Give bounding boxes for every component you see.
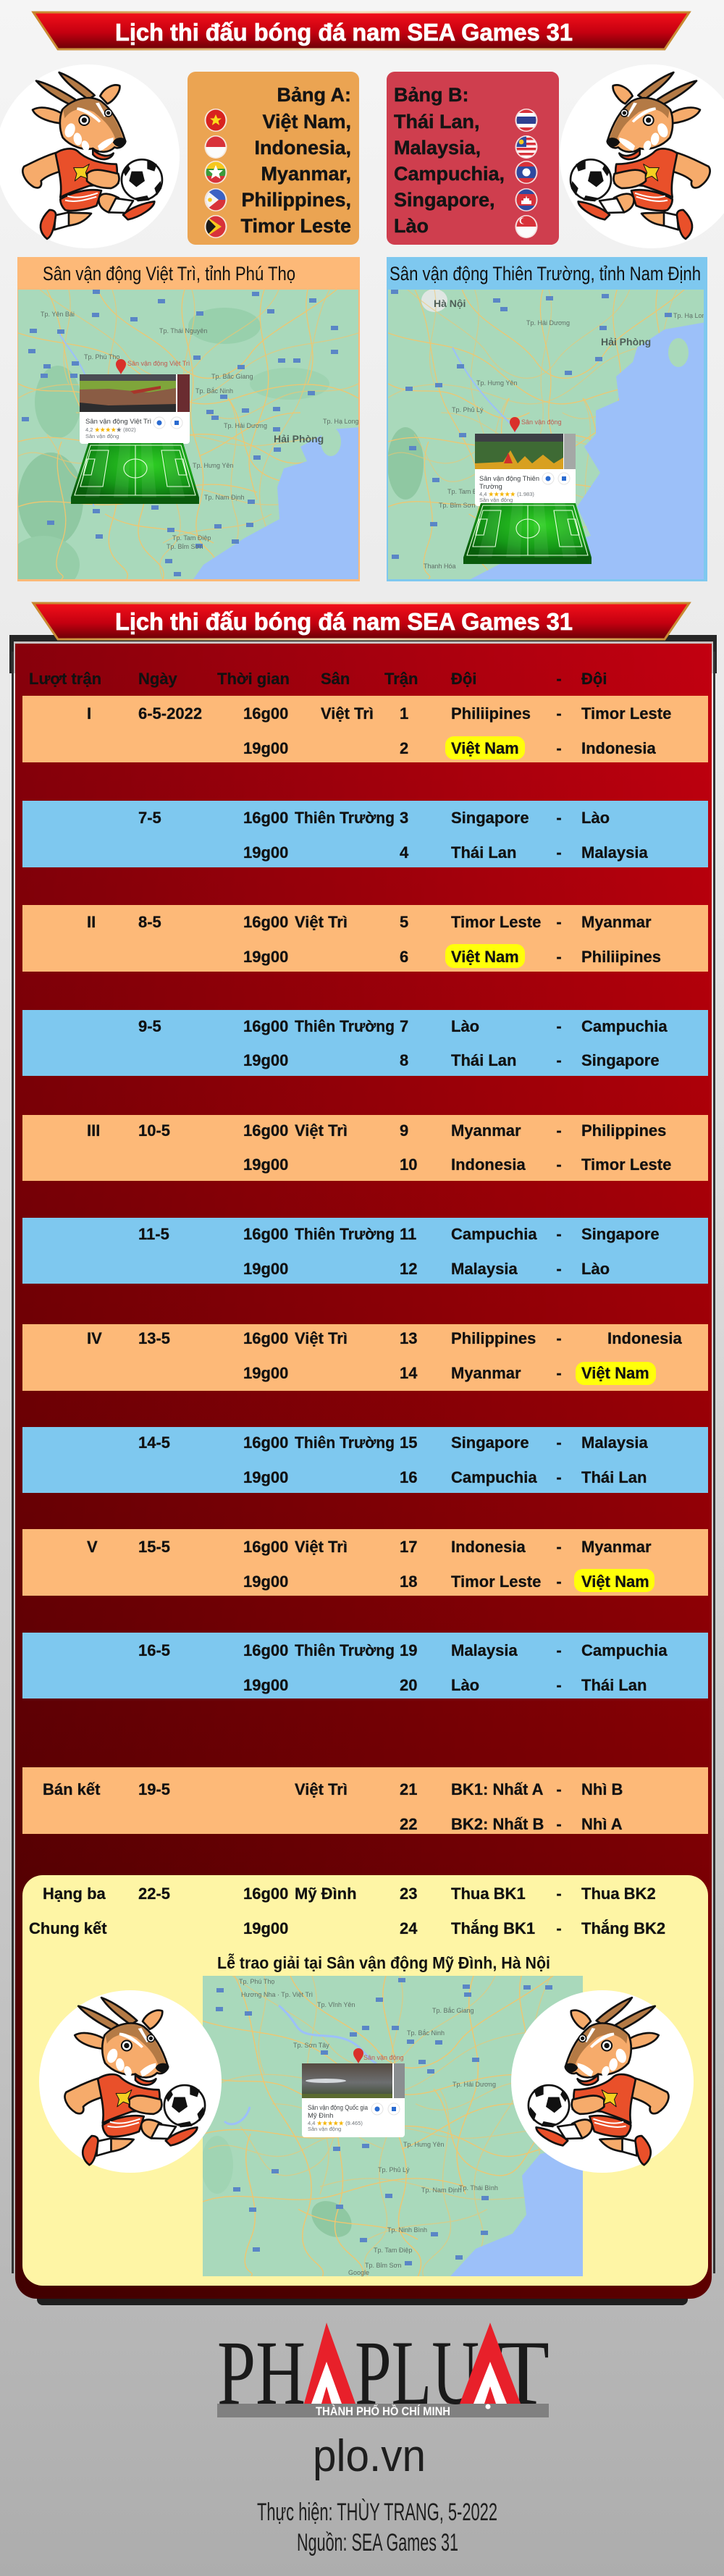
matches 7-5: Thiên Trường [295, 809, 395, 827]
map: Nam Dinh area: Tp. Phủ Lý [452, 406, 484, 413]
semi-finals: 22 [400, 1815, 417, 1833]
round I 6-5: - [556, 739, 562, 757]
round II 8-5: Philiipines [581, 948, 661, 966]
round IV 13-5: Indonesia [607, 1329, 682, 1347]
semi-finals [22, 1767, 708, 1834]
third place and final rows: Thua BK1 [451, 1885, 526, 1903]
matches 14-5: Thiên Trường [295, 1434, 395, 1452]
round V 15-5: Myanmar [581, 1538, 652, 1556]
semi-finals: - [556, 1780, 562, 1798]
table header row: Lượt trận [29, 670, 101, 688]
third place and final rows [29, 1885, 665, 1937]
round I 6-5: 16g00 [243, 704, 288, 723]
stadium info card: Viet Tri: Sân vận động [85, 433, 119, 439]
third place and final rows: 22-5 [138, 1885, 170, 1903]
round V 15-5 [22, 1529, 708, 1596]
matches 11-5 [22, 1218, 708, 1284]
round III 10-5: 9 [400, 1121, 408, 1140]
right mascot circle [560, 64, 724, 248]
stadium info card: Thien Truong: Sân vận động [479, 497, 513, 503]
matches 7-5: - [556, 843, 562, 862]
group A team names: Timor Leste [240, 215, 351, 237]
group B team names: Singapore, [394, 189, 495, 211]
matches 9-5: Singapore [581, 1051, 660, 1069]
third place and final rows: Hạng ba [43, 1885, 106, 1903]
round V 15-5: Timor Leste [451, 1573, 541, 1591]
round III 10-5: 10-5 [138, 1121, 170, 1140]
round V 15-5: Việt Trì [295, 1538, 348, 1556]
third place and final rows: 23 [400, 1885, 417, 1903]
map: Viet Tri area: Hải Phòng [274, 433, 324, 445]
matches 16-5: Thái Lan [581, 1676, 647, 1694]
round II 8-5: 5 [400, 913, 408, 931]
map: My Dinh area: Tp. Phú Thọ [239, 1978, 274, 1985]
round V 15-5: 16g00 [243, 1538, 288, 1556]
group A team names: Myanmar, [261, 163, 351, 185]
group B team names: Malaysia, [394, 137, 481, 159]
round III 10-5: Timor Leste [581, 1156, 671, 1174]
matches 11-5: Singapore [581, 1225, 660, 1243]
matches 16-5 [22, 1633, 708, 1699]
round IV 13-5: 16g00 [243, 1329, 288, 1347]
third place and final rows: - [556, 1885, 562, 1903]
stadium info card: My Dinh: Mỹ Đình [308, 2112, 333, 2120]
matches 9-5: Thái Lan [451, 1051, 516, 1069]
round IV 13-5: Việt Trì [295, 1329, 348, 1347]
round V 15-5: 15-5 [138, 1538, 170, 1556]
source line: Nguồn: SEA Games 31 [297, 2529, 458, 2556]
group A team names: Philippines, [241, 189, 351, 211]
matches 9-5: - [556, 1051, 562, 1069]
semi-finals: 21 [400, 1780, 417, 1798]
stadium info card: Thien Truong [475, 434, 576, 506]
panel: schedule table [9, 635, 717, 2305]
matches 14-5: 16 [400, 1468, 417, 1486]
stadium info card: Viet Tri: Sân vận động Việt Trì [85, 418, 152, 426]
icon: Laos flag [515, 161, 538, 184]
matches 9-5: 9-5 [138, 1017, 161, 1035]
third place and final rows: Thắng BK2 [581, 1919, 665, 1937]
map: My Dinh area: Tp. Phủ Lý [378, 2166, 410, 2173]
round IV 13-5: 19g00 [243, 1364, 288, 1382]
round II 8-5: - [556, 948, 562, 966]
matches 16-5: 20 [400, 1676, 417, 1694]
round III 10-5: III [87, 1121, 100, 1140]
stadium info card: Viet Tri: 4,2 ★★★★★ (802) [85, 426, 136, 433]
round II 8-5 [22, 905, 708, 972]
map: Nam Dinh area: Tp. Bỉm Sơn [439, 502, 475, 509]
map: Nam Dinh area: Tp. Tam Điệp [447, 488, 486, 495]
map: My Dinh area: Tp. Bắc Ninh [407, 2029, 445, 2037]
round II 8-5: Việt Nam [451, 948, 519, 966]
stadium info card: Viet Tri [80, 374, 190, 444]
round III 10-5: Philippines [581, 1121, 666, 1140]
matches 14-5: - [556, 1468, 562, 1486]
table header row: Ngày [138, 670, 178, 688]
group B team names [394, 84, 505, 237]
round I 6-5: Philiipines [451, 704, 531, 723]
stadium info card: My Dinh: Sân vận động Quốc gia [308, 2104, 369, 2112]
semi-finals: Bán kết [43, 1780, 101, 1798]
map: My Dinh area: Tp. Hưng Yên [403, 2141, 444, 2148]
round V 15-5: - [556, 1538, 562, 1556]
round III 10-5: - [556, 1156, 562, 1174]
icon: football pitch Thien Truong [463, 503, 592, 564]
matches 16-5: - [556, 1676, 562, 1694]
semi-finals: Nhì A [581, 1815, 623, 1833]
round V 15-5: Việt Nam [581, 1573, 649, 1591]
round V 15-5: 19g00 [243, 1573, 288, 1591]
map: My Dinh area: Tp. Bỉm Sơn [365, 2262, 401, 2269]
table header row: Đội [581, 670, 607, 688]
icon: Myanmar flag [204, 161, 227, 184]
matches 16-5: 19g00 [243, 1676, 288, 1694]
matches 7-5: 16g00 [243, 809, 288, 827]
logo: Phap Luat: PH [217, 2323, 306, 2424]
map: Nam Dinh area [387, 289, 710, 581]
panel: Viet Tri stadium map [7, 257, 360, 594]
round IV 13-5 [22, 1324, 708, 1391]
logo red A with circumflex [460, 2323, 521, 2409]
matches 14-5 [22, 1427, 708, 1493]
matches 7-5: 4 [400, 843, 409, 862]
semi-finals: - [556, 1815, 562, 1833]
matches 16-5: Thiên Trường [295, 1641, 395, 1659]
matches 16-5: Malaysia [451, 1641, 518, 1659]
matches 9-5: Lào [451, 1017, 479, 1035]
matches 7-5: - [556, 809, 562, 827]
icon: Indonesia flag [204, 135, 227, 159]
matches 7-5 [22, 801, 708, 867]
map: Viet Tri area: Tp. Hải Dương [224, 422, 267, 429]
matches 11-5: 19g00 [243, 1260, 288, 1278]
icon: Malaysia flag [515, 135, 538, 159]
round III 10-5: Việt Trì [295, 1121, 348, 1140]
round III 10-5: 10 [400, 1156, 417, 1174]
round II 8-5: - [556, 913, 562, 931]
icon: map pin Thien Truong: Sân vận động [521, 418, 562, 426]
map: Nam Dinh area: Hà Nội [434, 298, 466, 309]
round III 10-5: - [556, 1121, 562, 1140]
left mascot circle [0, 64, 180, 248]
stadium info card: My Dinh: 4,4 ★★★★★ (9.465) [308, 2120, 363, 2126]
map: My Dinh area: Tp. Sơn Tây [293, 2042, 329, 2049]
group A team names: Việt Nam, [262, 111, 351, 132]
top title banner [33, 12, 689, 49]
map: Nam Dinh area: Hải Phòng [601, 336, 651, 348]
stadium info card: My Dinh [302, 2063, 405, 2137]
map: My Dinh area: Tp. Bắc Giang [432, 2007, 474, 2014]
logo: Phap Luat: T [497, 2323, 550, 2424]
matches 9-5: 19g00 [243, 1051, 288, 1069]
round III 10-5: Indonesia [451, 1156, 526, 1174]
icon: map pin My Dinh: Sân vận động [363, 2054, 404, 2061]
group A team names: Bảng A: [277, 84, 351, 106]
round II 8-5: Việt Trì [295, 913, 348, 931]
semi-finals: Nhì B [581, 1780, 623, 1798]
logo: Phap Luat [217, 2323, 550, 2424]
map: My Dinh area: Hương Nha · Tp. Việt Trì [241, 1991, 313, 1998]
website address: plo.vn [313, 2431, 426, 2481]
round III 10-5: 16g00 [243, 1121, 288, 1140]
round I 6-5: Việt Nam [451, 739, 519, 757]
round II 8-5: II [87, 913, 96, 931]
round V 15-5: 18 [400, 1573, 417, 1591]
round I 6-5: Việt Trì [321, 704, 374, 723]
matches 7-5: 3 [400, 809, 408, 827]
matches 7-5: Malaysia [581, 843, 648, 862]
round IV 13-5: - [556, 1329, 562, 1347]
third place and final rows: Chung kết [29, 1919, 107, 1937]
map: Viet Tri area: Tp. Nam Định [204, 494, 245, 501]
map: Viet Tri area [7, 290, 360, 594]
round IV 13-5: Việt Nam [581, 1364, 649, 1382]
icon: map pin Viet Tri: Sân vận động Việt Trì [127, 360, 190, 367]
matches 11-5: - [556, 1260, 562, 1278]
matches 16-5: - [556, 1641, 562, 1659]
matches 11-5: 11-5 [138, 1225, 169, 1243]
left finals mascot [39, 1990, 222, 2173]
credit line: Thực hiện: THÙY TRANG, 5-2022 [257, 2499, 497, 2526]
map: My Dinh area: Tp. Tam Điệp [374, 2247, 412, 2254]
round I 6-5: 2 [400, 739, 408, 757]
round II 8-5: Myanmar [581, 913, 652, 931]
matches 9-5 [22, 1010, 708, 1076]
round II 8-5: 16g00 [243, 913, 288, 931]
matches 16-5: 16g00 [243, 1641, 288, 1659]
round I 6-5: Indonesia [581, 739, 656, 757]
matches 14-5: 16g00 [243, 1434, 288, 1452]
third place and final rows: Thắng BK1 [451, 1919, 535, 1937]
table header row: - [556, 670, 562, 688]
round I 6-5: 19g00 [243, 739, 288, 757]
group B team names: Lào [394, 215, 429, 237]
matches 14-5: Thái Lan [581, 1468, 647, 1486]
stadium info card: Thien Truong: 4,4 ★★★★★ (1.983) [479, 491, 534, 497]
matches 11-5: 16g00 [243, 1225, 288, 1243]
round I 6-5 [22, 696, 708, 762]
matches 16-5: 16-5 [138, 1641, 170, 1659]
matches 16-5: Campuchia [581, 1641, 668, 1659]
matches 16-5: Lào [451, 1676, 479, 1694]
matches 14-5: 15 [400, 1434, 417, 1452]
semi-finals: BK1: Nhất A [451, 1780, 544, 1798]
round I 6-5: 6-5-2022 [138, 704, 202, 723]
third place and final rows: Thua BK2 [581, 1885, 656, 1903]
matches 7-5: Lào [581, 809, 610, 827]
table header row [29, 670, 607, 688]
semi-finals: 19-5 [138, 1780, 170, 1798]
icon: map pin My Dinh [353, 2048, 404, 2063]
matches 14-5: Singapore [451, 1434, 529, 1452]
map: Viet Tri area: Tp. Tam Điệp [172, 534, 211, 542]
icon: football pitch Viet Tri [71, 443, 199, 504]
panel: Thien Truong stadium map [387, 257, 710, 581]
map: Viet Tri area: Tp. Bỉm Sơn [167, 543, 203, 550]
stadium info card: Thien Truong: Sân vận động Thiên [479, 475, 539, 483]
logo red A with acute [304, 2323, 355, 2404]
matches 11-5: 11 [400, 1225, 416, 1243]
map: Nam Dinh area: Thanh Hóa [424, 563, 456, 570]
icon: Thailand flag [515, 109, 538, 132]
round V 15-5: V [87, 1538, 98, 1556]
round I 6-5: Timor Leste [581, 704, 671, 723]
heading: award ceremony: Lễ trao giải tại Sân vận động Mỹ Đình, Hà Nội [217, 1953, 550, 1972]
matches 16-5: 19 [400, 1641, 417, 1659]
round IV 13-5: - [556, 1364, 562, 1382]
round I 6-5: - [556, 704, 562, 723]
map: My Dinh area: Tp. Ninh Bình [387, 2226, 427, 2234]
round V 15-5: Indonesia [451, 1538, 526, 1556]
map: My Dinh area [201, 1976, 583, 2277]
matches 11-5: Malaysia [451, 1260, 518, 1278]
map: Viet Tri area: Tp. Bắc Giang [211, 373, 253, 380]
map: My Dinh area: Tp. Hải Dương [452, 2081, 496, 2088]
round V 15-5: - [556, 1573, 562, 1591]
round II 8-5: Timor Leste [451, 913, 541, 931]
matches 14-5: Campuchia [451, 1468, 537, 1486]
matches 9-5: Thiên Trường [295, 1017, 395, 1035]
table header row: Trận [384, 670, 418, 688]
map: Viet Tri area: Tp. Yên Bái [41, 311, 75, 318]
icon: Singapore flag [515, 215, 538, 238]
third place and final rows: - [556, 1919, 562, 1937]
matches 7-5: 19g00 [243, 843, 288, 862]
top title banner: Lịch thi đấu bóng đá nam SEA Games 31 [115, 19, 573, 46]
round IV 13-5: 13-5 [138, 1329, 170, 1347]
round V 15-5: 17 [400, 1538, 417, 1556]
stadium info card: My Dinh: Sân vận động [308, 2126, 341, 2132]
group B team names: Campuchia, [394, 163, 505, 185]
table header row: Thời gian [217, 670, 290, 688]
panel: group B [387, 72, 559, 245]
right finals mascot [511, 1990, 694, 2173]
matches 9-5: 8 [400, 1051, 408, 1069]
map: My Dinh area: Tp. Vĩnh Yên [317, 2001, 355, 2008]
matches 9-5: Campuchia [581, 1017, 668, 1035]
semi-finals: Việt Trì [295, 1780, 348, 1798]
round III 10-5 [22, 1115, 708, 1181]
panel: group A [188, 72, 359, 245]
group B team names: Bảng B: [394, 84, 469, 106]
icon: Vietnam flag [204, 109, 227, 132]
group A team names: Indonesia, [254, 137, 351, 159]
map: My Dinh area: Google [348, 2269, 369, 2276]
second title banner: Lịch thi đấu bóng đá nam SEA Games 31 [115, 608, 573, 635]
icon: Timor Leste flag [204, 215, 227, 238]
matches 11-5: Lào [581, 1260, 610, 1278]
third place and final rows: 19g00 [243, 1919, 288, 1937]
map: Viet Tri area: Tp. Hạ Long [323, 418, 359, 425]
icon: Cambodia flag [515, 188, 538, 211]
third place and final rows: 16g00 [243, 1885, 288, 1903]
matches 9-5: - [556, 1017, 562, 1035]
table header row: Đội [451, 670, 476, 688]
map: Viet Tri area: Tp. Bắc Ninh [195, 387, 233, 395]
map: Viet Tri area: Tp. Hưng Yên [193, 462, 233, 469]
matches 14-5: 19g00 [243, 1468, 288, 1486]
matches 11-5: - [556, 1225, 562, 1243]
finals panel [22, 1875, 708, 2286]
third place and final rows: 24 [400, 1919, 418, 1937]
table header row: Sân [321, 670, 350, 688]
round III 10-5: Myanmar [451, 1121, 521, 1140]
round IV 13-5: Philippines [451, 1329, 536, 1347]
matches 7-5: 7-5 [138, 809, 161, 827]
semi-finals: BK2: Nhất B [451, 1815, 544, 1833]
third place and final rows: Mỹ Đình [295, 1885, 357, 1903]
matches 9-5: 7 [400, 1017, 408, 1035]
round IV 13-5: 14 [400, 1364, 418, 1382]
matches 9-5: 16g00 [243, 1017, 288, 1035]
stadium info card: Thien Truong: Trường [479, 483, 502, 491]
matches 7-5: Singapore [451, 809, 529, 827]
map: Nam Dinh area: Tp. Hạ Long [673, 312, 710, 319]
matches 7-5: Thái Lan [451, 843, 516, 862]
logo: Phap Luat: PLU [355, 2323, 479, 2424]
second title banner [33, 603, 689, 639]
map: My Dinh area: Tp. Nam Định [421, 2186, 462, 2194]
heading: Viet Tri stadium: Sân vận động Việt Trì, tỉnh Phú Thọ [43, 263, 295, 285]
round IV 13-5: IV [87, 1329, 102, 1347]
round II 8-5: 6 [400, 948, 408, 966]
matches 11-5: Campuchia [451, 1225, 537, 1243]
logo subline: THÀNH PHỐ HỒ CHÍ MINH [316, 2404, 450, 2418]
matches 14-5: Malaysia [581, 1434, 648, 1452]
group B team names: Thái Lan, [394, 111, 480, 132]
map: Nam Dinh area: Tp. Hưng Yên [476, 379, 517, 387]
round I 6-5: 1 [400, 704, 408, 723]
matches 14-5: - [556, 1434, 562, 1452]
map: Viet Tri area: Tp. Thái Nguyên [159, 327, 207, 334]
map: Viet Tri area: Tp. Phú Thọ [84, 353, 119, 361]
icon: map pin Thien Truong [510, 417, 562, 432]
round I 6-5: I [87, 704, 91, 723]
round II 8-5: 8-5 [138, 913, 161, 931]
round II 8-5: 19g00 [243, 948, 288, 966]
map: My Dinh area: Tp. Thái Bình [459, 2184, 498, 2192]
icon: map pin Viet Tri [116, 359, 190, 374]
round III 10-5: 19g00 [243, 1156, 288, 1174]
group A team names [240, 84, 351, 237]
matches 14-5: 14-5 [138, 1434, 170, 1452]
round IV 13-5: 13 [400, 1329, 417, 1347]
icon: Philippines flag [204, 188, 227, 211]
matches 11-5: 12 [400, 1260, 417, 1278]
matches 11-5: Thiên Trường [295, 1225, 395, 1243]
round IV 13-5: Myanmar [451, 1364, 521, 1382]
map: Nam Dinh area: Tp. Hải Dương [526, 319, 570, 327]
